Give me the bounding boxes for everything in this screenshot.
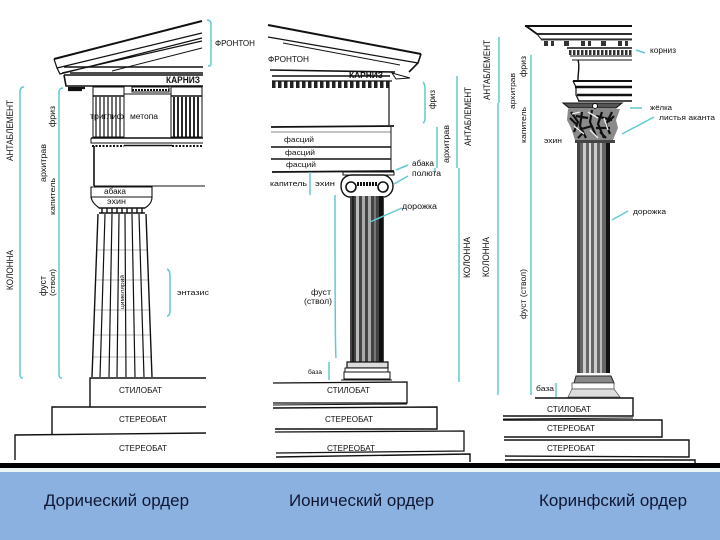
corinthian labels: дорожка: [633, 209, 666, 216]
doric labels: архитрав: [39, 144, 48, 182]
ionic labels: фуст: [311, 287, 331, 297]
ionic pediment: [268, 25, 421, 72]
ionic labels: эхин: [315, 181, 335, 188]
doric labels: эхин: [107, 197, 126, 206]
ionic labels: фриз: [428, 90, 437, 109]
doric cornice: [64, 75, 203, 90]
caption: ionic order: Ионический ордер: [289, 491, 434, 510]
ionic labels: фасций: [285, 148, 315, 157]
corinthian labels: СТИЛОБАТ: [547, 405, 591, 414]
corinthian fluted shaft: [577, 143, 610, 373]
ionic labels: АНТАБЛЕМЕНТ: [463, 87, 473, 146]
corinthian labels: фриз: [519, 56, 528, 77]
doric steps: [15, 378, 206, 460]
doric labels: СТИЛОБАТ: [119, 385, 162, 395]
corinthian frieze edge: [577, 60, 580, 80]
doric labels: КОЛОННА: [5, 250, 15, 290]
ionic architrave fasciae: [271, 126, 394, 172]
corinthian labels: СТЕРЕОБАТ: [547, 444, 595, 453]
ionic labels: архитрав: [442, 125, 451, 163]
doric labels: абака: [104, 187, 127, 196]
panel: doric order diagram: [5, 20, 255, 460]
corinthian dimension brackets: [498, 37, 654, 397]
doric triglyphs and metope: [93, 87, 202, 137]
corinthian labels: листья аканта: [659, 113, 716, 122]
doric labels: триглиф: [90, 112, 124, 121]
doric dimension brackets: [20, 20, 211, 378]
corinthian labels: корниз: [650, 46, 676, 55]
doric labels: цимелярий: [119, 275, 126, 309]
corinthian steps: [503, 398, 695, 463]
ionic labels: база: [308, 368, 322, 376]
ionic labels: КАРНИЗ: [349, 70, 383, 80]
ionic cornice with dentils: [270, 70, 410, 84]
panel: ionic order diagram: [268, 25, 473, 462]
ionic labels: ФРОНТОН: [268, 54, 309, 64]
ionic capital with volutes: [341, 172, 394, 197]
doric capital: [91, 187, 152, 213]
caption: corinthian order: Коринфский ордер: [539, 491, 687, 510]
doric labels: фуст: [38, 276, 48, 296]
doric taenia and architrave: [91, 138, 205, 186]
ionic dimension brackets: [310, 76, 459, 382]
ionic labels: СТЕРЕОБАТ: [325, 414, 373, 424]
ionic labels: СТИЛОБАТ: [327, 385, 370, 395]
panel: corinthian order diagram: [481, 26, 716, 463]
caption: doric order: Дорический ордер: [44, 491, 189, 510]
doric labels: КАРНИЗ: [166, 75, 200, 85]
ionic frieze edge: [388, 82, 390, 125]
corinthian labels: КОЛОННА: [481, 237, 491, 277]
corinthian capital with acanthus leaves: [563, 103, 622, 143]
ionic labels: [268, 54, 473, 453]
ionic labels: капитель: [270, 181, 307, 188]
doric labels: (ствол): [48, 268, 57, 296]
corinthian labels: [481, 40, 716, 453]
doric labels: [5, 38, 255, 453]
corinthian labels: архитрав: [508, 73, 517, 109]
ionic labels: полюта: [412, 169, 442, 178]
doric labels: СТЕРЕОБАТ: [119, 443, 167, 453]
ionic labels: СТЕРЕОБАТ: [327, 443, 375, 453]
corinthian labels: СТЕРЕОБАТ: [547, 424, 595, 433]
doric labels: метопа: [130, 112, 159, 121]
corinthian base: [568, 376, 620, 397]
ionic labels: абака: [412, 159, 435, 168]
ionic base: [341, 362, 392, 380]
doric labels: АНТАБЛЕМЕНТ: [5, 100, 15, 161]
ionic labels: (ствол): [304, 297, 332, 306]
ionic labels: фасций: [284, 135, 314, 144]
ionic labels: КОЛОННА: [462, 237, 472, 278]
doric pediment: [54, 21, 203, 74]
corinthian labels: АНТАБЛЕМЕНТ: [482, 40, 492, 100]
doric labels: СТЕРЕОБАТ: [119, 414, 167, 424]
doric labels: энтазис: [177, 288, 209, 297]
ionic labels: фасций: [286, 160, 316, 169]
caption band: [0, 463, 720, 540]
ionic steps: [273, 382, 470, 462]
ionic fluted shaft: [350, 196, 384, 362]
corinthian cornice: [525, 26, 632, 60]
doric labels: капитель: [50, 178, 57, 215]
doric labels: ФРОНТОН: [215, 38, 255, 48]
corinthian labels: жёлка: [650, 105, 672, 112]
corinthian labels: база: [536, 384, 555, 393]
ionic labels: дорожка: [402, 202, 438, 211]
doric fluted shaft: [92, 214, 152, 377]
corinthian labels: эхин: [544, 138, 562, 145]
corinthian labels: фуст (ствол): [519, 269, 528, 319]
corinthian architrave: [573, 81, 632, 101]
corinthian labels: капитель: [521, 107, 528, 143]
doric labels: фриз: [48, 106, 57, 127]
